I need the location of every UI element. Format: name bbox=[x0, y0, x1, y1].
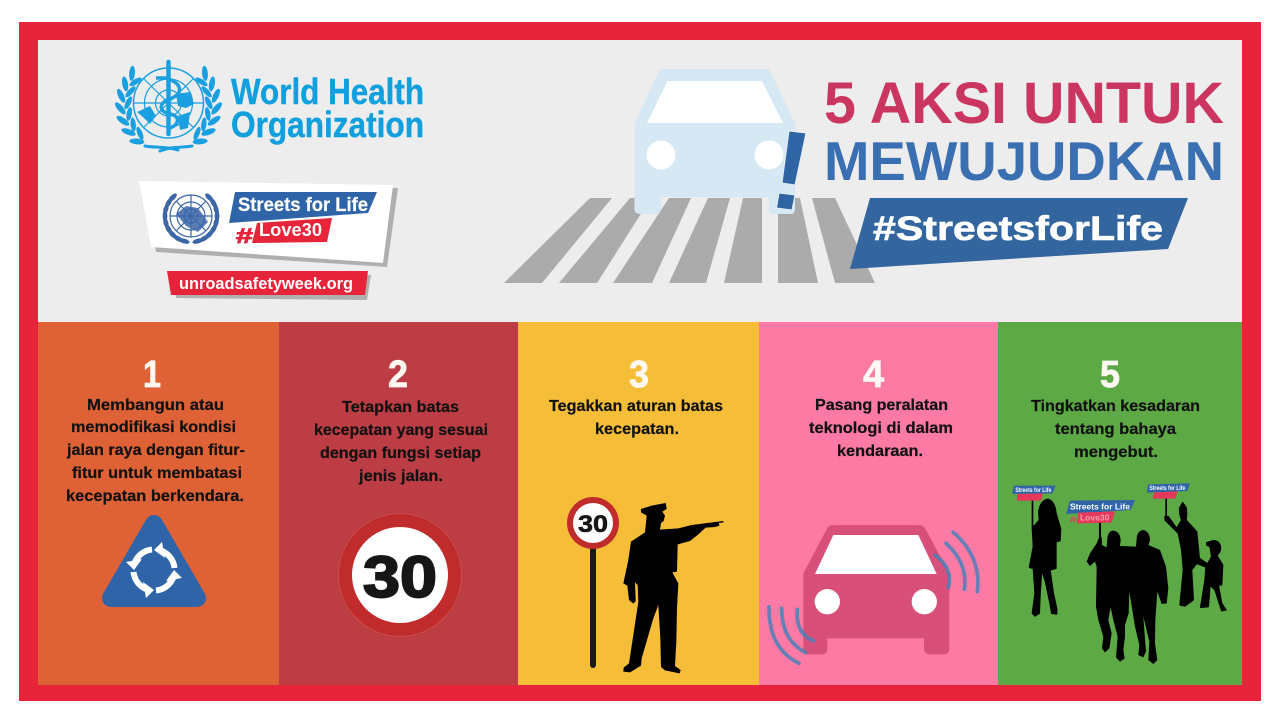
Love30 banner: # bbox=[236, 225, 253, 248]
Love30 banner bbox=[236, 218, 332, 248]
silhouette: two men with sign: Streets for Life bbox=[1070, 501, 1130, 511]
silhouette: two men with sign: # bbox=[1070, 516, 1077, 525]
WHO wordmark: World Health bbox=[231, 71, 424, 112]
zebra crossing bbox=[504, 198, 875, 283]
panel 1: road modification bbox=[38, 322, 279, 685]
icon: 30 speed sign bbox=[338, 514, 462, 636]
number 3: 3 bbox=[629, 354, 649, 396]
panel 2: speed limits bbox=[279, 322, 518, 685]
text: action 4: Pasang peralatan bbox=[815, 397, 948, 414]
icon: UN emblem bbox=[162, 192, 220, 245]
text: action 5: Tingkatkan kesadaran bbox=[1031, 398, 1200, 415]
panel 5: awareness bbox=[998, 322, 1242, 685]
text: action 3 bbox=[549, 398, 723, 438]
panel 3: enforcement bbox=[518, 322, 759, 685]
text: action 2: Tetapkan batas bbox=[342, 399, 459, 416]
text: action 3: Tegakkan aturan batas bbox=[549, 398, 723, 415]
text: action 1: Membangun atau bbox=[87, 397, 224, 414]
title: MEWUJUDKAN bbox=[824, 130, 1224, 192]
number 1: 1 bbox=[143, 354, 161, 396]
icon: WHO emblem bbox=[113, 62, 224, 151]
text: action 2: kecepatan yang sesuai bbox=[314, 422, 488, 439]
icon: small 30 sign on pole: 30 bbox=[578, 511, 608, 538]
silhouette: two men with sign: Love30 bbox=[1080, 513, 1110, 522]
silhouette: adult and child with sign: Streets for Life bbox=[1149, 486, 1186, 492]
text: action 3: kecepatan. bbox=[595, 421, 679, 438]
icon: police officer silhouette bbox=[623, 503, 724, 673]
Love30 banner: Love30 bbox=[259, 220, 322, 240]
title bbox=[824, 71, 1224, 192]
silhouette: two men with sign bbox=[1066, 500, 1168, 664]
number 4: 4 bbox=[863, 354, 884, 396]
Streets for Life card bbox=[139, 181, 398, 267]
silhouette: woman with sign: Streets for Life bbox=[1015, 488, 1052, 494]
silhouette: adult and child with sign bbox=[1147, 483, 1226, 611]
text: action 5 bbox=[1031, 398, 1200, 461]
Streets for Life banner: Streets for Life bbox=[238, 195, 368, 216]
WHO wordmark: Organization bbox=[231, 104, 424, 145]
website badge bbox=[167, 271, 371, 300]
text: action 2: dengan fungsi setiap bbox=[320, 445, 481, 462]
text: action 5: tentang bahaya bbox=[1055, 421, 1176, 438]
text: action 1: fitur untuk membatasi bbox=[72, 465, 242, 482]
icon: small 30 sign on pole bbox=[567, 497, 619, 668]
number 2: 2 bbox=[388, 354, 408, 396]
icon: roundabout sign bbox=[111, 524, 197, 598]
icon: car with warning bbox=[634, 69, 806, 214]
text: action 1 bbox=[66, 397, 245, 505]
text: action 2 bbox=[314, 399, 488, 485]
hashtag banner: #StreetsforLife bbox=[873, 210, 1163, 248]
text: action 4: teknologi di dalam bbox=[809, 420, 953, 437]
hashtag banner bbox=[850, 198, 1188, 269]
text: action 4 bbox=[809, 397, 953, 460]
header panel background bbox=[38, 40, 1242, 322]
icon: people silhouettes with signs bbox=[1012, 483, 1226, 664]
silhouette: woman with sign bbox=[1012, 486, 1061, 616]
text: action 1: memodifikasi kondisi bbox=[71, 419, 236, 436]
title: 5 AKSI UNTUK bbox=[824, 71, 1224, 136]
text: action 1: kecepatan berkendara. bbox=[66, 488, 244, 505]
website badge: unroadsafetyweek.org bbox=[179, 275, 353, 293]
WHO wordmark bbox=[231, 71, 424, 145]
Streets for Life banner bbox=[229, 192, 377, 223]
icon: exclamation mark bbox=[776, 131, 806, 210]
icon: pink car with sensor waves bbox=[769, 525, 978, 663]
text: action 2: jenis jalan. bbox=[358, 468, 443, 485]
text: action 5: mengebut. bbox=[1074, 444, 1158, 461]
panel 4: in-vehicle technology bbox=[759, 322, 998, 685]
text: action 4: kendaraan. bbox=[837, 443, 923, 460]
icon: 30 speed sign: 30 bbox=[363, 545, 437, 610]
number 5: 5 bbox=[1100, 354, 1120, 396]
text: action 1: jalan raya dengan fitur- bbox=[66, 442, 245, 459]
WHO logo bbox=[113, 62, 424, 151]
